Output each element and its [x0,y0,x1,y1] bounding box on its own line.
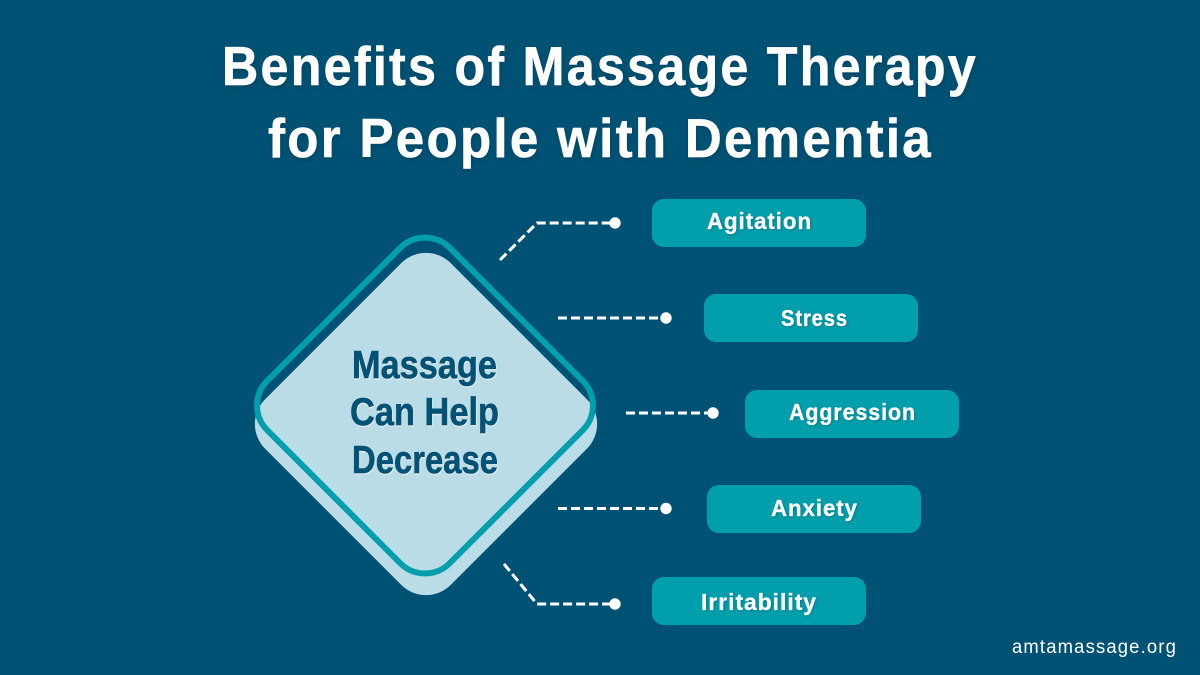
pill: aggression: Aggression [789,399,916,425]
connector: agitation [500,217,621,260]
title [222,35,978,169]
pill: stress: Stress [781,305,848,331]
pill: irritability: Irritability [701,589,817,615]
connector: anxiety [558,503,672,514]
pill: irritability [652,577,866,625]
footer source: amtamassage.org [1012,637,1177,658]
title: Benefits of Massage Therapy [222,35,978,97]
connector: irritability [504,564,621,610]
diamond label [350,344,499,482]
diamond outline [243,223,607,588]
pill: agitation [652,199,866,247]
diamond label: Decrease [352,439,498,482]
pill: anxiety: Anxiety [771,495,858,521]
diamond fill [240,238,612,610]
pill: agitation: Agitation [707,208,812,234]
pill: anxiety [707,485,921,533]
central diamond [240,223,612,610]
title: for People with Dementia [268,107,933,169]
diamond label: Massage [352,344,497,387]
pill: aggression [745,390,959,438]
connector: stress [558,312,672,324]
pill: stress [704,294,918,342]
connector: aggression [626,407,719,419]
diamond label: Can Help [350,391,499,434]
